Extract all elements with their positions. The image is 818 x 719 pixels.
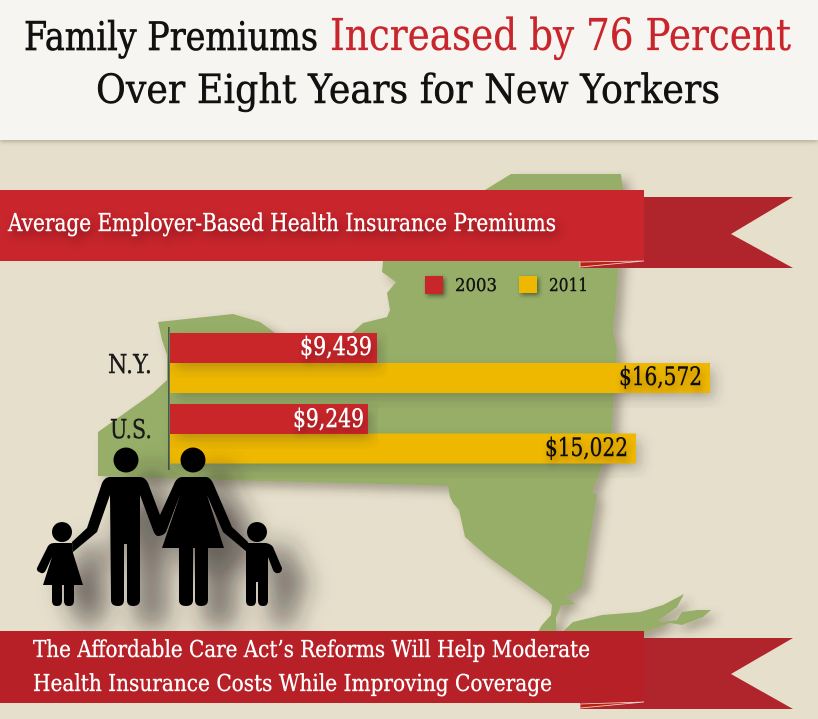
legend label 2003: 2003 [455, 275, 497, 296]
title panel [0, 0, 818, 140]
ribbon text line 2: Health Insurance Costs While Improving Coverage [33, 671, 552, 697]
legend label 2011: 2011 [549, 275, 588, 296]
icon: mother [158, 448, 248, 606]
bar: N.Y. 2003 [170, 333, 377, 363]
bar: U.S. 2003 [170, 404, 368, 434]
icon: boy [246, 522, 282, 606]
legend swatch 2011 [519, 276, 537, 293]
axis [168, 327, 170, 470]
icon: family silhouette [37, 448, 282, 606]
N.Y. label: N.Y. [108, 350, 152, 380]
bar chart [108, 327, 710, 470]
value: N.Y. 2011: $16,572 [619, 362, 702, 391]
top ribbon [0, 190, 793, 268]
title line 2: Over Eight Years for New Yorkers [96, 67, 720, 113]
title line 1 black: Family Premiums [24, 15, 318, 60]
ribbon heading: Average Employer-Based Health Insurance Premiums [7, 209, 556, 237]
value: U.S. 2003: $9,249 [293, 404, 364, 433]
ribbon fold [580, 261, 644, 267]
bar: U.S. 2011 [170, 434, 636, 464]
bar: N.Y. 2011 [170, 363, 710, 393]
legend [425, 275, 588, 296]
ribbon tail [580, 638, 793, 709]
ribbon text line 1: The Affordable Care Act’s Reforms Will Help Moderate [33, 637, 590, 663]
value: N.Y. 2003: $9,439 [300, 332, 372, 361]
ribbon band [0, 631, 644, 703]
ribbon fold [580, 702, 644, 708]
ribbon band [0, 190, 644, 261]
icon: father [72, 448, 163, 606]
bottom ribbon [0, 631, 793, 709]
ribbon tail [580, 197, 793, 268]
legend swatch 2003 [425, 276, 443, 294]
map: Long Island [558, 594, 711, 636]
value: U.S. 2011: $15,022 [545, 433, 628, 462]
U.S. label: U.S. [110, 415, 152, 445]
icon: girl [37, 522, 83, 606]
map: New York State [98, 174, 711, 640]
